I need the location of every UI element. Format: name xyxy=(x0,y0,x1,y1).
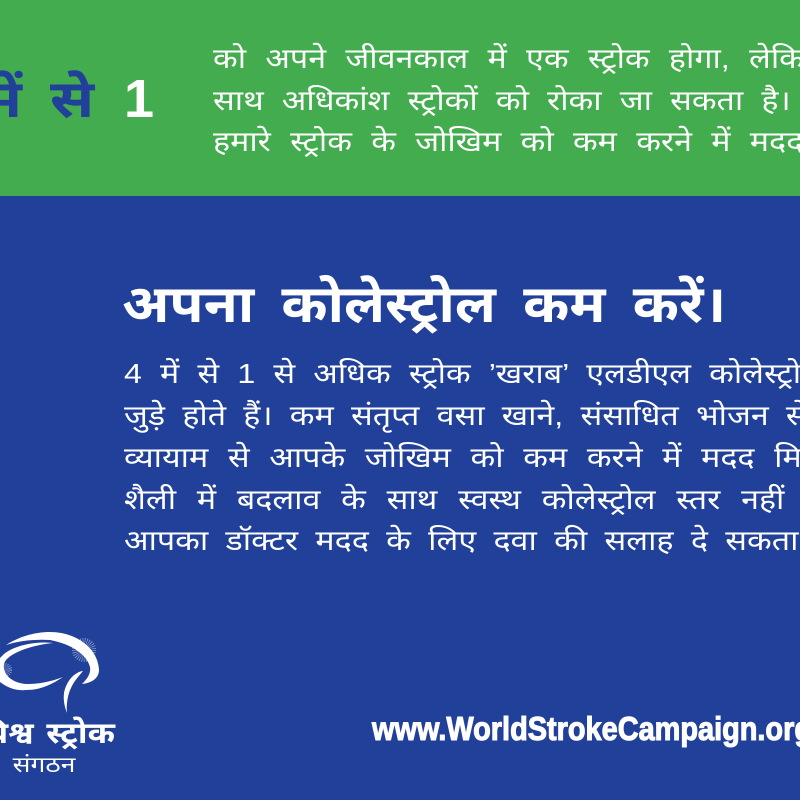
logo subtitle: संगठन xyxy=(13,753,76,777)
heading: 4 में से 1: 1 xyxy=(124,69,154,129)
panel: green header band xyxy=(0,0,800,196)
main heading: अपना कोलेस्ट्रोल कम करें। xyxy=(122,275,726,335)
logo: World Stroke Organization xyxy=(0,632,116,777)
header text block: हमारे स्ट्रोक के जोखिम को कम करने में मदद xyxy=(213,125,800,157)
body text block: आपका डॉक्टर मदद के लिए दवा की सलाह दे सकता xyxy=(124,524,800,556)
icon: brain swoosh xyxy=(0,632,99,713)
body text block: जुड़े होते हैं। कम संतृप्त वसा खाने, संसाधित भोजन से xyxy=(124,399,800,433)
body text block xyxy=(124,357,800,556)
header text block xyxy=(213,42,800,157)
body text block: शैली में बदलाव के साथ स्वस्थ कोलेस्ट्रोल स्तर नहीं xyxy=(124,483,786,515)
heading: 4 में से 1: से xyxy=(50,70,96,128)
header text block: साथ अधिकांश स्ट्रोकों को रोका जा सकता है। xyxy=(213,84,791,116)
heading: 4 में से 1 xyxy=(0,69,154,129)
